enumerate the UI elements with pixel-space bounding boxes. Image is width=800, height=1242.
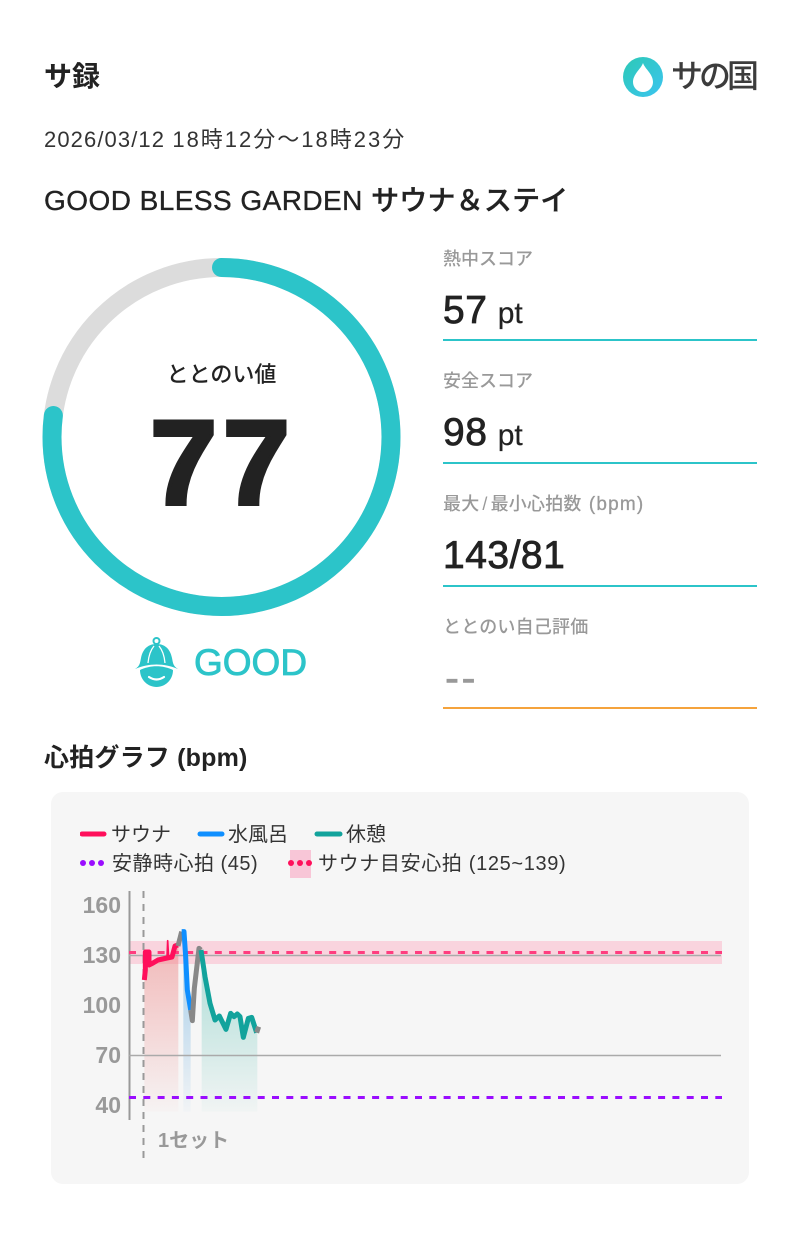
gauge [42,258,400,616]
legend: 安静時心拍 (45) [112,853,258,875]
set label: 1セット [158,1130,229,1152]
metric: ととのい自己評価 [443,617,757,709]
rating text: GOOD [194,642,307,683]
metric: 最大/最小心拍数: 143/81 [443,534,565,577]
y axis labels: 100 [83,992,121,1018]
legend: 休憩 [346,824,386,846]
legend: サウナ目安心拍 (125~139) [318,853,566,875]
target zone band [129,941,722,964]
y axis labels: 130 [83,942,121,968]
legend: サウナ [111,824,171,846]
metric: 安全スコア: 98 pt [443,411,523,454]
metric: 最大/最小心拍数 [443,494,757,587]
title: サ録 [44,61,100,92]
graph heading: 心拍グラフ (bpm) [44,744,248,772]
metric: 最大/最小心拍数: 最大/最小心拍数 (bpm) [443,494,644,515]
metric: ととのい自己評価: ととのい自己評価 [443,617,588,637]
logo [623,57,756,97]
gauge value: 77 [150,396,296,530]
metric: 熱中スコア: 熱中スコア [443,249,533,269]
metric: 熱中スコア [443,249,757,341]
y axis labels [83,892,121,1118]
y axis labels: 160 [83,892,121,918]
legend: 水風呂 [228,824,288,846]
y axis labels: 40 [95,1092,121,1118]
set marker [142,891,144,1158]
icon: sauna hat [135,637,178,687]
y axis [128,891,130,1120]
metric: ととのい自己評価: -- [445,654,478,701]
panel: heart rate graph [51,792,749,1184]
resting line [129,1096,722,1099]
target line [129,951,722,954]
grid lines [129,954,721,956]
legend [80,824,566,878]
logo: サの国 [671,58,755,94]
metric: 熱中スコア: 57 pt [443,289,523,332]
chart [83,891,722,1158]
heart rate line [144,932,259,1037]
facility name: GOOD BLESS GARDEN サウナ＆ステイ [44,185,568,216]
date: 2026/03/12 18時12分〜18時23分 [44,127,406,152]
metric: 安全スコア [443,371,757,464]
gauge label: ととのい値 [167,362,276,387]
metric: 安全スコア: 安全スコア [443,371,533,391]
area fills [144,945,257,1112]
y axis labels: 70 [95,1042,121,1068]
